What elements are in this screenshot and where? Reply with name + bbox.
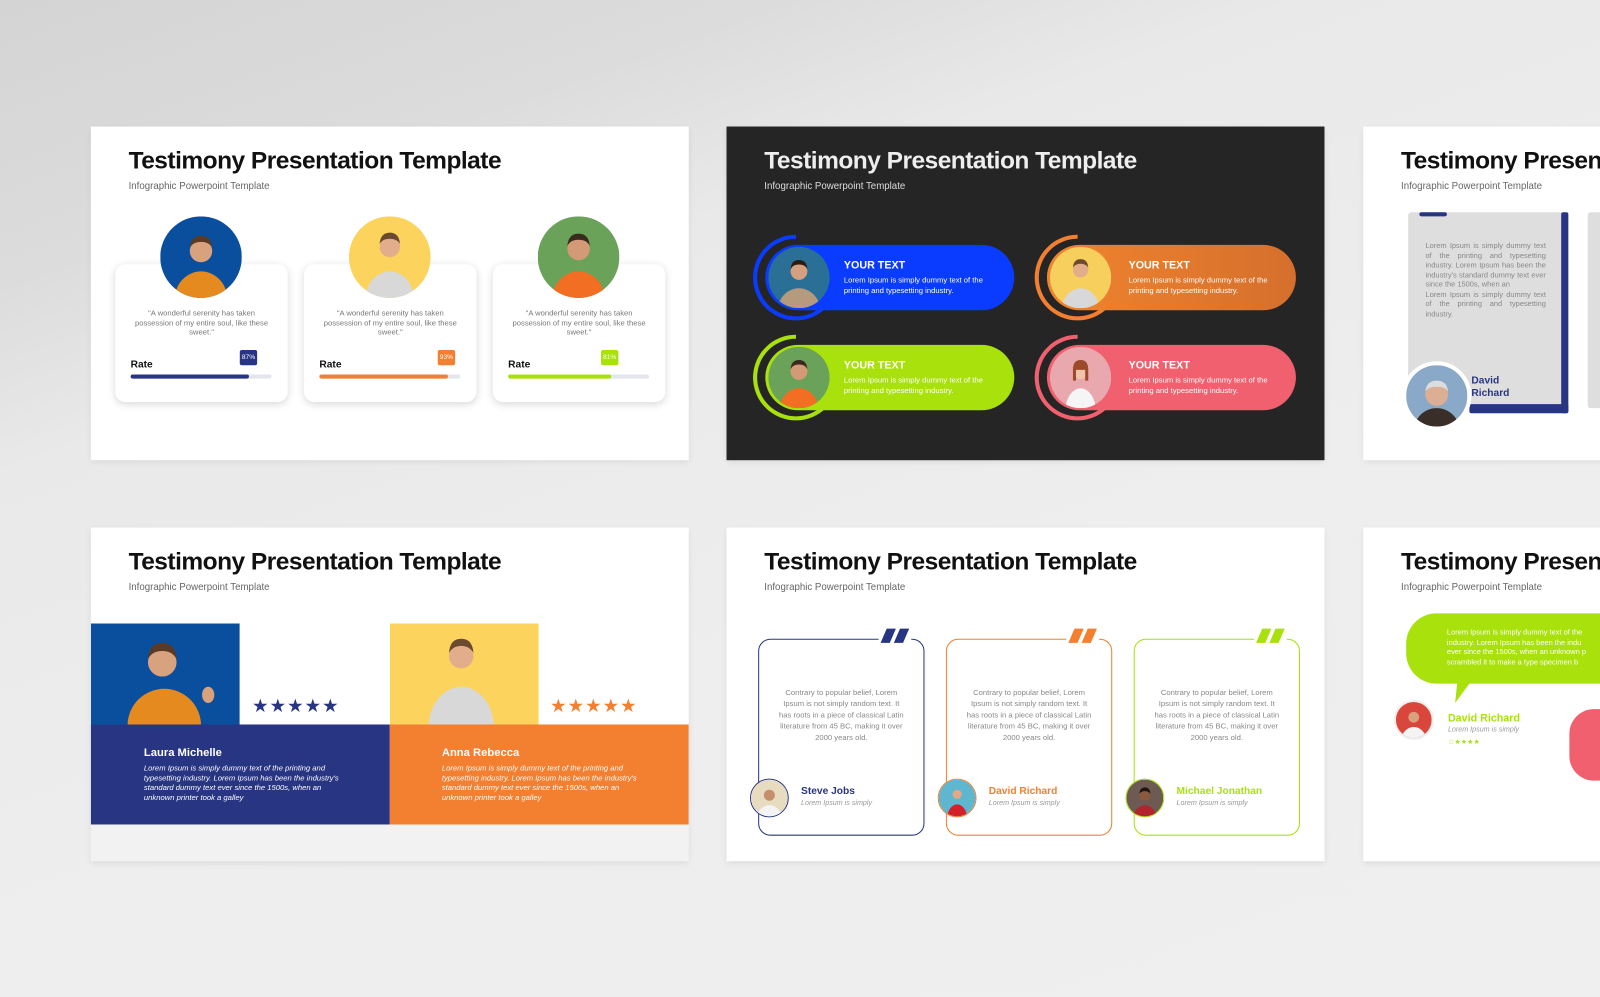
band: Laura Michelle: Laura Michelle xyxy=(144,747,222,759)
photo: blue xyxy=(160,216,242,298)
bubble: green xyxy=(1406,613,1600,703)
band: Laura Michelle: Lorem Ipsum is simply dummy text of the printing and typesetting industry. Lorem Ipsum has been the industry's standard dummy text ever since the 1500s, when an unknown printer took a galley xyxy=(144,763,339,802)
title: Testimony Presentation Template xyxy=(764,548,1137,576)
card: rate 87: "A wonderful serenity has taken possession of my entire soul, like these sweet." xyxy=(135,308,268,337)
photo: yellow box xyxy=(390,624,539,724)
subtitle: Infographic Powerpoint Template xyxy=(1401,582,1542,593)
card: David Richard xyxy=(1408,212,1568,414)
bubble: green: Lorem Ipsum is simply dummy text of the xyxy=(1447,628,1582,637)
card: David Richard: Lorem Ipsum is simply dummy text of the printing and typesetting industry. xyxy=(1425,289,1546,318)
bubble: green: scrambled it to make a type specimen b xyxy=(1447,657,1578,666)
stars: orange: ★★★★★ xyxy=(550,696,637,716)
pill: blue xyxy=(753,234,1014,320)
pill: pink: YOUR TEXT xyxy=(1129,359,1190,371)
pill: blue: Lorem Ipsum is simply dummy text of the printing and typesetting industry. xyxy=(844,276,983,295)
panel: rate cards xyxy=(91,127,689,460)
subtitle: Infographic Powerpoint Template xyxy=(764,582,905,593)
panel: card partial xyxy=(1363,127,1600,460)
card: rate 93: Rate xyxy=(319,359,342,370)
card: rate 87: Rate xyxy=(131,359,153,370)
subtitle: Infographic Powerpoint Template xyxy=(1401,181,1542,192)
subtitle: Infographic Powerpoint Template xyxy=(129,181,270,192)
pill: orange: YOUR TEXT xyxy=(1129,259,1190,271)
title: Testimony Presentation Template xyxy=(129,147,501,174)
quote box: David Richard xyxy=(946,639,1112,836)
photo: old man xyxy=(1402,361,1471,431)
title: Testimony Presentation Template xyxy=(129,548,501,576)
panel: dark pills xyxy=(727,127,1324,460)
quote box: David Richard: Lorem Ipsum is simply xyxy=(989,800,1060,807)
subtitle: Infographic Powerpoint Template xyxy=(129,582,270,593)
pill: green: YOUR TEXT xyxy=(844,359,905,371)
card: David Richard: Lorem Ipsum is simply dummy text of the printing and typesetting industry. Lorem Ipsum has been the industry's standard dummy text ever since the 1500s, when an xyxy=(1425,241,1546,289)
panel: photo band xyxy=(91,528,689,861)
pill: blue: YOUR TEXT xyxy=(844,259,905,271)
name: David Richard: David Richard xyxy=(1448,712,1520,724)
stars: navy: ★★★★★ xyxy=(252,696,339,716)
card: rate 87: 87% xyxy=(242,354,255,361)
panel: quote boxes xyxy=(727,528,1324,861)
card: rate 81: "A wonderful serenity has taken possession of my entire soul, like these sweet." xyxy=(512,308,646,337)
stars: ☆★★★★ xyxy=(1448,739,1480,746)
quote box: Michael Jonathan: Michael Jonathan xyxy=(1177,786,1262,797)
card: rate 81 xyxy=(493,264,665,402)
quote box: David Richard: David Richard xyxy=(989,786,1057,797)
quote box: Steve Jobs: Steve Jobs xyxy=(801,786,855,797)
panel: speech bubbles partial xyxy=(1363,528,1600,861)
title: Testimony Presentation Template xyxy=(764,147,1137,174)
quote box: Steve Jobs: Contrary to popular belief, Lorem Ipsum is not simply random text. It has roots in a piece of classical Latin literature from 45 BC, making it over 2000 years old. xyxy=(779,688,904,742)
quote box: Michael Jonathan: Lorem Ipsum is simply xyxy=(1177,800,1248,807)
bubble: green: ever since the 1500s, when an unknown p xyxy=(1447,647,1586,656)
pill: green: Lorem Ipsum is simply dummy text of the printing and typesetting industry. xyxy=(844,376,983,395)
pill: orange: Lorem Ipsum is simply dummy text of the printing and typesetting industry. xyxy=(1129,276,1268,295)
avatar: David Richard xyxy=(1394,700,1434,740)
band: Anna Rebecca xyxy=(390,724,689,824)
card: rate 87 xyxy=(115,264,288,402)
pill: pink: Lorem Ipsum is simply dummy text of the printing and typesetting industry. xyxy=(1129,376,1268,395)
card: David Richard: David xyxy=(1471,376,1499,387)
card: rate 93: "A wonderful serenity has taken possession of my entire soul, like these sweet." xyxy=(324,308,457,337)
quote box: Steve Jobs xyxy=(758,639,924,836)
photo: yellow xyxy=(349,216,430,298)
band: Laura Michelle xyxy=(91,724,390,824)
card: rate 93 xyxy=(304,264,477,402)
quote box: Michael Jonathan: Contrary to popular belief, Lorem Ipsum is not simply random text. It has roots in a piece of classical Latin literature from 45 BC, making it over 2000 years old. xyxy=(1155,688,1279,742)
photo: green xyxy=(538,216,620,298)
card: rate 81: Rate xyxy=(508,359,530,370)
band: Anna Rebecca: Lorem Ipsum is simply dummy text of the printing and typesetting industry. Lorem Ipsum has been the industry's standard dummy text ever since the 1500s, when an unknown printer took a galley xyxy=(442,763,637,802)
pill: pink xyxy=(1034,334,1296,420)
subtitle: Infographic Powerpoint Template xyxy=(764,181,905,192)
bubble: pink partial xyxy=(1569,709,1600,781)
panel: speech bubbles partial: Lorem Ipsum is simply xyxy=(1448,727,1519,734)
card: rate 93: 93% xyxy=(440,354,453,361)
quote box: Michael Jonathan xyxy=(1134,639,1300,836)
card: David Richard: Richard xyxy=(1471,388,1509,399)
card: rate 81: 81% xyxy=(603,354,616,361)
pill: green xyxy=(753,334,1014,420)
card: second partial xyxy=(1588,212,1600,408)
photo: blue box xyxy=(91,624,240,724)
bubble: green: industry. Lorem Ipsum has been the indu xyxy=(1447,637,1581,646)
pill: orange xyxy=(1034,234,1296,320)
quote box: Steve Jobs: Lorem Ipsum is simply xyxy=(801,800,872,807)
quote box: David Richard: Contrary to popular belief, Lorem Ipsum is not simply random text. It has roots in a piece of classical Latin literature from 45 BC, making it over 2000 years old. xyxy=(967,688,1091,742)
band: Anna Rebecca: Anna Rebecca xyxy=(442,747,519,759)
